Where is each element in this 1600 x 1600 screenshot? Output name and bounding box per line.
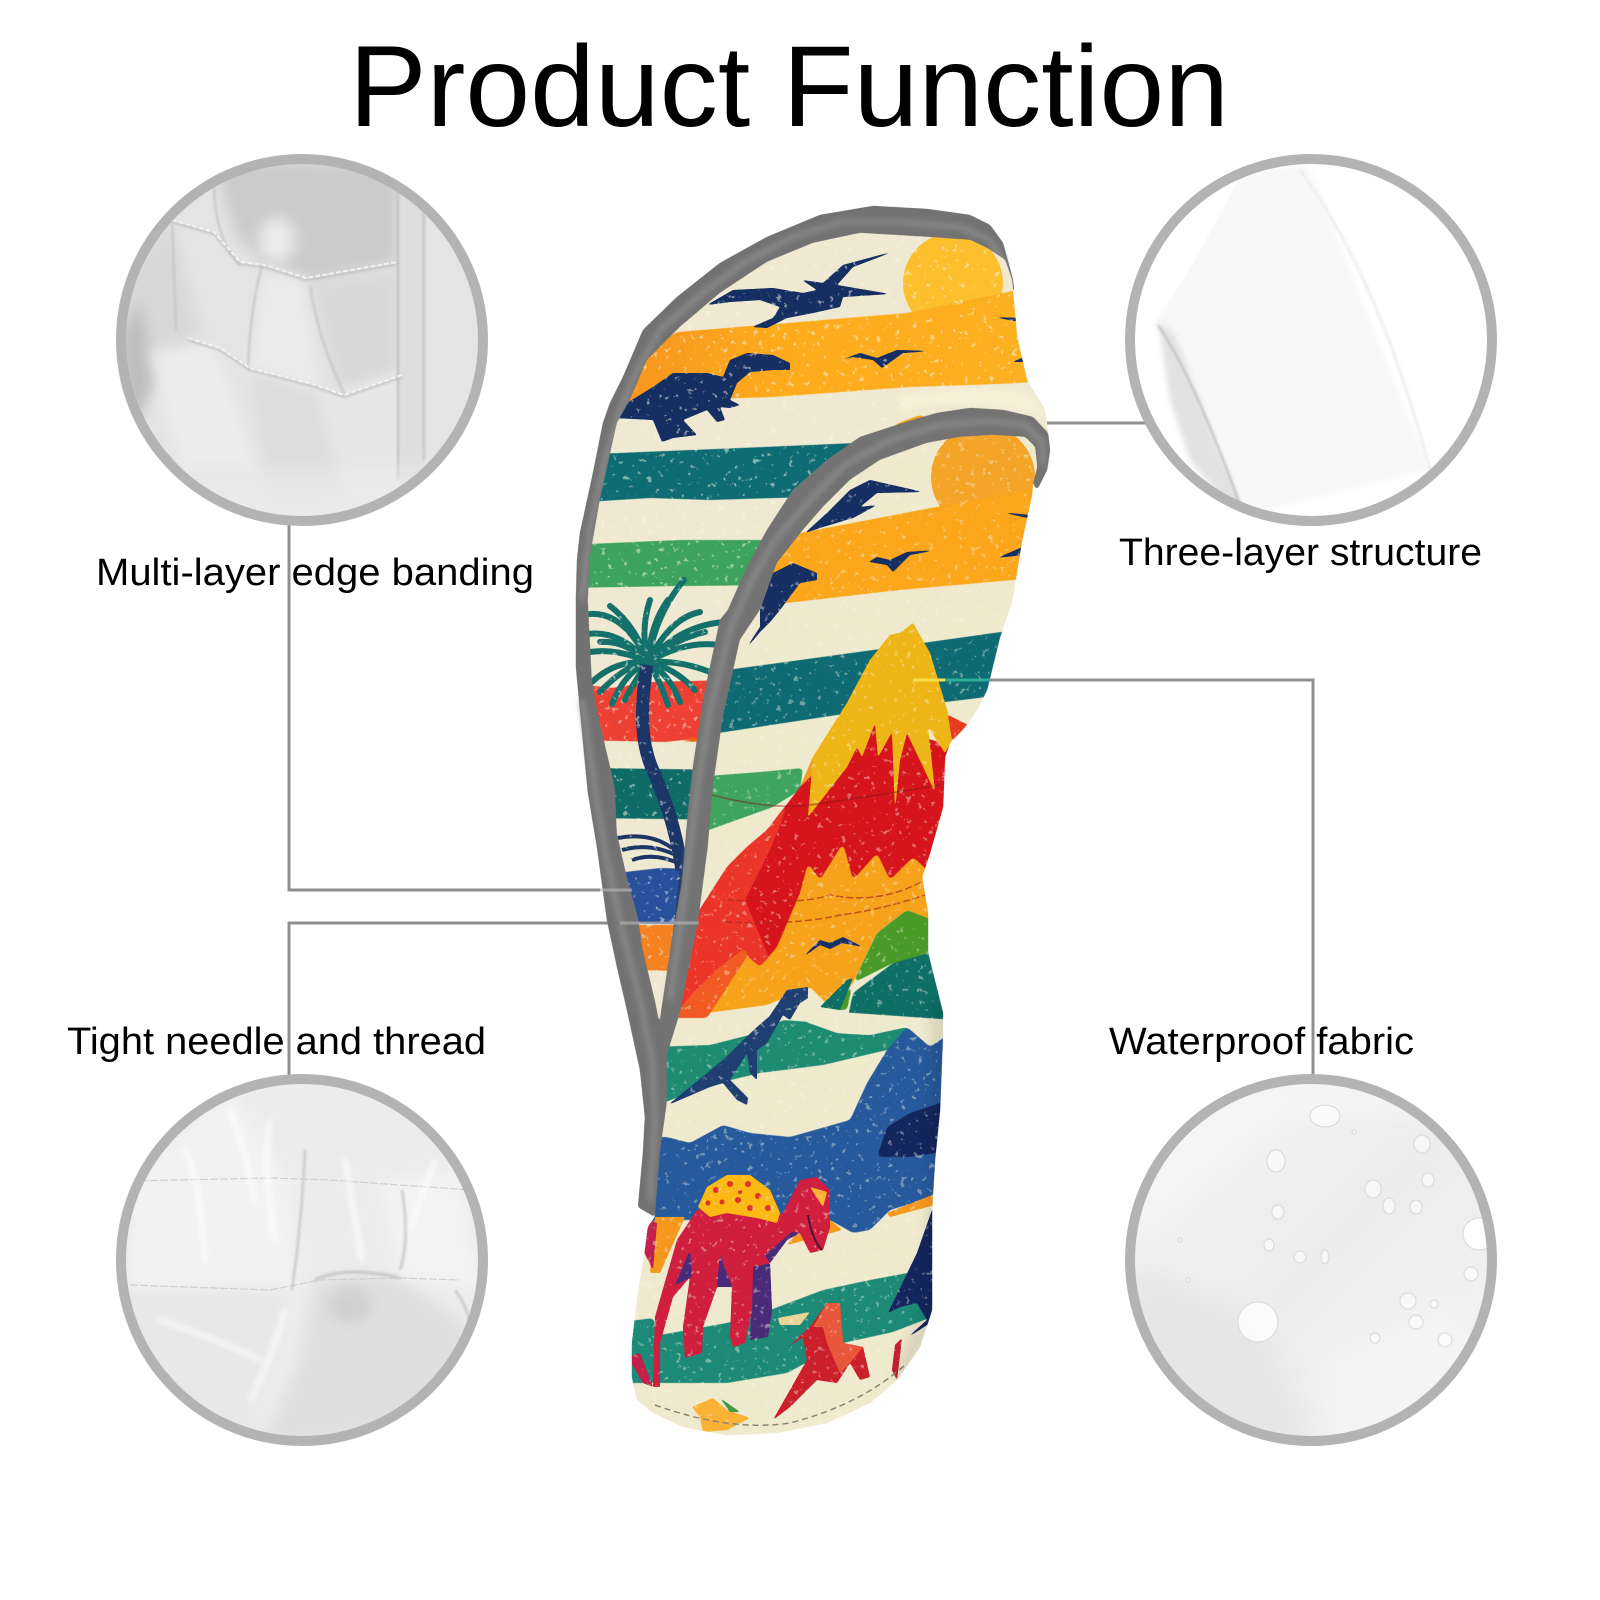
front panel binding — [660, 408, 1050, 1055]
label: multi-layer edge banding: Multi-layer edge banding — [96, 552, 534, 594]
circle ring — [1130, 159, 1492, 521]
infographic canvas — [68, 42, 1497, 1446]
label: three-layer structure: Three-layer structure — [1119, 532, 1482, 574]
pterosaur and birds — [615, 251, 1025, 442]
water droplets — [1178, 1105, 1495, 1347]
circle ring — [121, 1079, 483, 1441]
binding highlight — [582, 222, 1005, 1200]
red feet on right — [892, 1338, 902, 1380]
label: tight needle and thread: Tight needle and thread — [67, 1021, 486, 1063]
detail circle: waterproof fabric — [1120, 1070, 1510, 1460]
raptor — [668, 987, 808, 1105]
detail circle: three-layer structure — [1120, 150, 1510, 540]
connector lines crossing the product — [600, 680, 990, 923]
lower waves — [666, 1020, 926, 1102]
small red dinosaur — [773, 1303, 870, 1420]
label: waterproof fabric: Waterproof fabric — [1109, 1021, 1414, 1063]
small dinosaurs and birds — [745, 480, 1030, 650]
back panel print — [588, 232, 1048, 1020]
detail circle: tight needle and thread — [110, 1070, 500, 1460]
binding highlight — [670, 421, 1043, 1000]
navy dinosaur leg — [888, 1210, 932, 1336]
palm tree — [588, 580, 725, 705]
panel shading — [900, 1000, 940, 1380]
detail circle: multi-layer edge banding — [110, 150, 500, 540]
hem stitching — [655, 1365, 905, 1425]
circle ring — [1130, 1079, 1492, 1441]
left background legs — [644, 1221, 657, 1268]
hills — [836, 910, 928, 1010]
title: Product Function — [349, 23, 1229, 151]
connector lines — [289, 423, 1313, 1075]
back panel binding — [576, 206, 1014, 1217]
sun and sunset stripe — [931, 434, 1035, 506]
front panel print — [632, 434, 1038, 1436]
red dinosaur — [653, 1175, 830, 1387]
yellow turtle at the hem — [692, 1398, 750, 1432]
fold highlight near collar — [904, 393, 1032, 408]
circle ring — [121, 159, 483, 521]
product illustration: golf headcover — [576, 206, 1050, 1436]
volcano — [672, 623, 970, 1018]
